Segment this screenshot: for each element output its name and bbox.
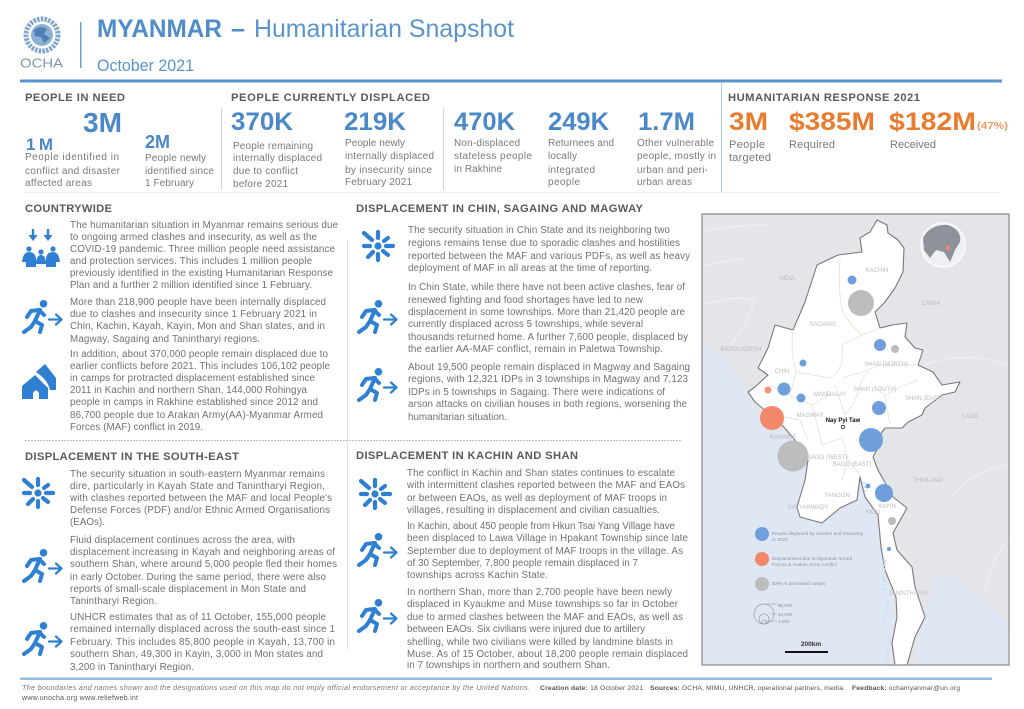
text block: newly displaced: due to clashes and insecurity since 1 February 2021 in (70, 309, 317, 320)
panel: people currently displaced: PEOPLE CURRENTLY DISPLACED (231, 92, 430, 104)
text block: security situation: Defense Forces (PDF) and/or Ethnic Armed Organisations (70, 505, 330, 516)
panel: people in need: 1M (26, 135, 53, 154)
text block: northern Shan: due to armed clashes between the MAF and EAOs, as well as (407, 612, 683, 623)
icon: person fleeing (359, 533, 396, 565)
text block: security situation (69, 469, 332, 528)
text block: fluid displacement: Tanintharyi Region. (70, 596, 157, 607)
panel: people currently displaced: 219K (344, 108, 406, 136)
map legend (754, 527, 864, 624)
text block: Magway and Sagaing: IDPs in 5 townships in Sagaing. There were indications of (408, 387, 665, 398)
map legend: 10,000 (778, 612, 792, 617)
map labels (720, 268, 978, 597)
text block: northern Shan: displaced in Kyaukme and Muse townships so far in October (407, 599, 679, 610)
map labels: MAGWAY (797, 413, 823, 419)
text block: Chin security: The security situation in Chin State and its neighboring two (408, 225, 671, 236)
date: October 2021 (97, 56, 194, 75)
panel: people currently displaced: People remaining (233, 141, 313, 152)
text block: protracted displacement: 2011 in Kachin and northern Shan, 144,000 Rohingya (70, 385, 308, 396)
map legend: 90,000 (778, 603, 792, 608)
map legend: People displaced by clashes and insecurity (772, 531, 864, 536)
text block: Chin security: deployment of MAF in all areas at the time of reporting. (408, 263, 652, 274)
panel: people in need: 2M (145, 132, 170, 152)
icon: person fleeing (24, 300, 62, 332)
text block: UNHCR estimates: remained internally displaced across the south-east since 1 (70, 624, 335, 635)
map labels: RAKHINE (770, 435, 796, 441)
panel: humanitarian response 2021: targeted (729, 152, 771, 164)
panel: people currently displaced: people, mostly in (637, 151, 716, 162)
map labels: MON (866, 510, 880, 516)
panel: people in need (25, 92, 214, 189)
panel: countrywide: COUNTRYWIDE (25, 203, 113, 215)
map labels: SHAN (NORTH) (864, 362, 908, 368)
capital marker: Nay Pyi Taw (826, 418, 861, 424)
panel: people currently displaced: internally displaced (233, 153, 322, 164)
panel: countrywide (22, 203, 339, 433)
text block: protracted displacement (70, 349, 331, 433)
text block: security situation: with clashes reported between the MAF and local People's (69, 493, 332, 504)
map labels: SHAN (SOUTH) (853, 387, 897, 393)
text block: protracted displacement: Forces (MAF) conflict in 2019. (70, 422, 203, 433)
panel: people currently displaced: internally displaced (345, 151, 434, 162)
text block: UNHCR estimates: February. This includes 85,800 people in Kayah, 13,700 in (70, 637, 335, 648)
map legend: in 2021 (772, 537, 788, 542)
panel: humanitarian response 2021: Received (890, 139, 936, 151)
panel: humanitarian response 2021: (47%) (977, 120, 1008, 132)
panel: people in need: 3M (83, 107, 122, 138)
text block: UNHCR estimates: southern Shan, 49,300 in Kayin, 3,000 in Mon states and (70, 649, 323, 660)
icon: clashes burst (24, 479, 53, 507)
panel: people currently displaced: urban areas (637, 177, 692, 188)
title: MYANMAR (97, 15, 222, 43)
text block: Kachin: September due to deployment of MAF troops in the village. As (407, 546, 683, 557)
proportional circles (760, 276, 899, 551)
footer: www.unocha.org www.reliefweb.int (21, 695, 138, 702)
footer: The boundaries and names shown and the designations used on this map do not imply official endorsement or acceptance by the United Nations. (22, 683, 530, 692)
panel: people currently displaced: 1.7M (638, 108, 695, 136)
text block: protracted displacement: 86,700 people due to Arakan Army(AA)-Myanmar Armed (70, 410, 323, 421)
text block: Magway and Sagaing: About 19,500 people remain displaced in Magway and Sagaing (408, 362, 690, 373)
panel: people currently displaced: urban and peri- (637, 165, 708, 176)
text block: northern Shan: Muse. As of 15 October, about 18,200 people remain displaced (407, 649, 688, 660)
text block: security situation: (EAOs). (70, 517, 105, 528)
map labels: BANGLADESH (720, 347, 762, 353)
map legend: IDPs in protracted camps (772, 581, 826, 586)
panel: humanitarian response 2021: Required (789, 139, 835, 151)
text block: Chin State: In Chin State, while there have not been active clashes, fear of (408, 282, 685, 293)
text block: northern Shan: shelling, while two civilians were killed by landmine blasts in (407, 637, 673, 648)
panel: displacement in the south-east: DISPLACEMENT IN THE SOUTH-EAST (25, 451, 239, 463)
text block: protracted displacement: people in camps in Rakhine established since 2012 and (70, 397, 318, 408)
map labels: MANDALAY (814, 392, 846, 398)
text block: overview: Plan and a further 2 million identified since 1 February. (70, 280, 312, 291)
text block: northern Shan (407, 587, 688, 671)
text block: protracted displacement: In addition, about 370,000 people remain displaced due to (70, 349, 329, 360)
icon: person fleeing (24, 549, 62, 581)
text block: security situation: The security situation in south-eastern Myanmar remains (70, 469, 325, 480)
OCHA logo: OCHA (20, 56, 64, 70)
map labels: THAILAND (913, 478, 944, 484)
text block: Chin security (408, 225, 690, 274)
footer (21, 683, 960, 702)
text block: Chin State: thousands returned home. A further 7,600 people, displaced by (408, 332, 688, 343)
text block: Kachin: In Kachin, about 450 people from Hkun Tsai Yang Village have (407, 521, 676, 532)
map labels: SAGAING (809, 322, 837, 328)
map of Myanmar (702, 214, 1009, 665)
OCHA logo (20, 19, 64, 70)
text block: Chin security: regions remains tense due to sporadic clashes and hostilities (408, 238, 680, 249)
title: Humanitarian Snapshot (254, 15, 514, 43)
panel: displacement in Chin, Sagaing and Magway: DISPLACEMENT IN CHIN, SAGAING AND MAGWAY (356, 203, 644, 215)
text block: Kachin and Shan conflict: The conflict in Kachin and Shan states continues to escalate (407, 468, 676, 479)
panel: people in need: PEOPLE IN NEED (25, 92, 125, 104)
panel: people currently displaced: 370K (231, 108, 293, 136)
panel: people currently displaced: integrated (548, 165, 595, 176)
footer: Sources: OCHA, MIMU, UNHCR, operational partners, media. (650, 685, 845, 692)
panel: humanitarian response 2021: $182M (889, 108, 976, 136)
panel: people currently displaced: February 2021 (345, 177, 412, 188)
map legend: Forces & Arakan Army conflict (772, 562, 838, 567)
footer: Creation date: 18 October 2021 (540, 685, 643, 692)
text block: Kachin and Shan conflict: or between EAOs, as well as deployment of MAF troops in (407, 493, 667, 504)
panel: people in need: identified since (145, 166, 214, 177)
text block: UNHCR estimates (70, 612, 335, 673)
panel: people currently displaced: in Rakhine (454, 164, 502, 175)
icon: clashes burst (361, 480, 390, 508)
panel: people currently displaced: by insecurity since (345, 165, 432, 176)
panel: people currently displaced: 470K (454, 108, 515, 136)
map labels: AYEYARWADY (787, 505, 829, 511)
text block: Chin State (408, 282, 688, 355)
text block: Chin State: displacement in some townships. More than 21,420 people are (408, 307, 686, 318)
map labels: LAOS (962, 414, 978, 420)
text block: newly displaced (70, 297, 326, 345)
text block: protracted displacement: in camps for protracted displacement established since (70, 373, 316, 384)
icon: person fleeing (359, 368, 396, 400)
text block: overview (70, 220, 339, 291)
map labels: KACHIN (866, 268, 888, 274)
text block: UNHCR estimates: UNHCR estimates that as of 11 October, 155,000 people (70, 612, 327, 623)
panel: displacement in the south-east (24, 451, 337, 673)
text block: newly displaced: Chin, Kachin, Kayah, Kayin, Mon and Shan states, and in (70, 321, 325, 332)
text block: Chin State: renewed fighting and food shortages have led to new (408, 295, 644, 306)
panel: people currently displaced: 249K (548, 108, 609, 136)
text block: fluid displacement: Fluid displacement continues across the area, with (70, 535, 295, 546)
panel: humanitarian response 2021: HUMANITARIAN RESPONSE 2021 (728, 92, 920, 104)
panel: people currently displaced (231, 92, 716, 190)
text block: Kachin: been displaced to Lawa Village in Hpakant Township since late (407, 533, 689, 544)
panel: humanitarian response 2021 (728, 92, 1008, 164)
panel: people currently displaced: due to conflict (233, 166, 298, 177)
map legend: 1,000 (778, 619, 790, 624)
map labels: TANINTHARYI (888, 591, 928, 597)
panel: people currently displaced: Non-displaced (454, 138, 520, 149)
text block: UNHCR estimates: 3,200 in Tanintharyi Region. (70, 662, 194, 673)
text block: overview: previously identified in the existing Humanitarian Response (70, 268, 334, 279)
text block: newly displaced: Magway, Sagaing and Tanintharyi regions. (70, 334, 260, 345)
map labels: CHINA (922, 301, 940, 307)
icon: person fleeing (359, 300, 396, 332)
icon: person fleeing (359, 599, 396, 631)
text block: overview: to ongoing armed clashes and insecurity, as well as the (70, 232, 318, 243)
panel: displacement in Kachin and Shan: DISPLACEMENT IN KACHIN AND SHAN (356, 450, 578, 462)
panel: people currently displaced: Other vulnerable (637, 138, 714, 149)
text block: Kachin (407, 521, 689, 581)
text block: newly displaced: More than 218,900 people have been internally displaced (70, 297, 326, 308)
text block: protracted displacement: earlier conflicts before 2021. This includes 106,102 people (70, 361, 331, 372)
map labels: CHIN (775, 369, 789, 375)
panel: humanitarian response 2021: People (729, 139, 765, 151)
text block: Kachin and Shan conflict (406, 468, 685, 516)
text block: fluid displacement: displacement increasing in Kayah and neighboring areas of (70, 547, 335, 558)
panel: people in need: People identified in (25, 152, 119, 163)
icon: people in need (22, 229, 60, 267)
panel: people in need: affected areas (25, 178, 92, 189)
panel: humanitarian response 2021: $385M (789, 108, 875, 136)
map legend: Displacement due to Myanmar Armed (772, 556, 852, 561)
panel: humanitarian response 2021: 3M (729, 108, 768, 136)
text block: Magway and Sagaing (408, 362, 690, 423)
Myanmar outline (748, 220, 960, 665)
globe locator (921, 223, 965, 267)
text block: Kachin and Shan conflict: villages, resulting in displacement and civilian casualties. (407, 505, 660, 516)
text block: security situation: dire, particularly in Kayah State and Tanintharyi Region, (70, 481, 325, 492)
text block: overview: The humanitarian situation in Myanmar remains serious due (70, 220, 339, 231)
map labels: KAYIN (878, 504, 896, 510)
title (97, 15, 514, 43)
map labels: INDIA (779, 276, 795, 282)
text block: northern Shan: between EAOs. Six civilians were injured due to artillery (407, 624, 645, 635)
text block: fluid displacement: reports of small-scale displacement in Mon State and (70, 584, 306, 595)
panel: displacement in Kachin and Shan (356, 450, 689, 671)
text block: overview: COVID-19 pandemic. Three million people need assistance (70, 244, 336, 255)
panel: displacement in Chin, Sagaing and Magway (356, 203, 690, 423)
capital marker (826, 418, 861, 429)
panel: people currently displaced: Returnees and (548, 138, 614, 149)
panel: people currently displaced: people (548, 177, 580, 188)
scale bar: 200km (801, 641, 821, 648)
panel: people currently displaced: stateless people (454, 151, 532, 162)
map labels: BAGO (EAST) (833, 462, 871, 468)
map labels: BAGO (WEST) (807, 455, 847, 461)
panel: people currently displaced: before 2021 (233, 179, 288, 190)
text block: Chin security: reported between the MAF and various PDFs, as well as heavy (408, 251, 690, 262)
panel: people currently displaced: People newly (345, 138, 405, 149)
text block: northern Shan: In northern Shan, more than 2,700 people have been newly (407, 587, 672, 598)
panel: people currently displaced: locally (548, 151, 577, 162)
icon: person fleeing (24, 622, 62, 654)
map labels: SHAN (EAST) (905, 396, 943, 402)
text block: Chin State: the earlier AA-MAF conflict, remain in Paletwa Township. (408, 344, 663, 355)
map labels: YANGON (824, 493, 850, 499)
icon: clashes burst (364, 232, 393, 260)
text block: northern Shan: in 7 townships in northern and southern Shan. (407, 660, 610, 671)
header (20, 15, 514, 75)
text block: fluid displacement: southern Shan, where around 5,000 people fled their homes (70, 559, 337, 570)
panel: people in need: conflict and disaster (25, 166, 121, 177)
text block: fluid displacement (70, 535, 337, 607)
text block: Chin State: currently displaced across 5 townships, while several (408, 319, 643, 330)
panel: people in need: People newly (145, 153, 206, 164)
text block: Kachin and Shan conflict: with intermittent clashes reported between the MAF and EAOs (406, 480, 685, 491)
text block: Magway and Sagaing: arson attacks on civilian houses in both regions, worsening the (408, 399, 688, 410)
panel: people in need: 1 February (145, 178, 194, 189)
text block: Magway and Sagaing: regions, with 12,321 IDPs in 3 townships in Magway and 7,123 (408, 374, 689, 385)
icon: camp tents (22, 364, 56, 399)
title: – (231, 15, 245, 43)
text block: Kachin: townships across Kachin State. (407, 570, 548, 581)
text block: fluid displacement: in early October. During the same period, there were also (70, 572, 327, 583)
text block: Magway and Sagaing: humanitarian situation. (408, 412, 507, 423)
scale bar (785, 641, 828, 653)
text block: Kachin: of 30 September, 7,800 people remain displaced in 7 (407, 558, 638, 569)
footer: Feedback: ochamyanmar@un.org (852, 685, 960, 692)
text block: overview: and protection services. This includes 1 million people (70, 256, 313, 267)
coastal islands (864, 482, 890, 660)
